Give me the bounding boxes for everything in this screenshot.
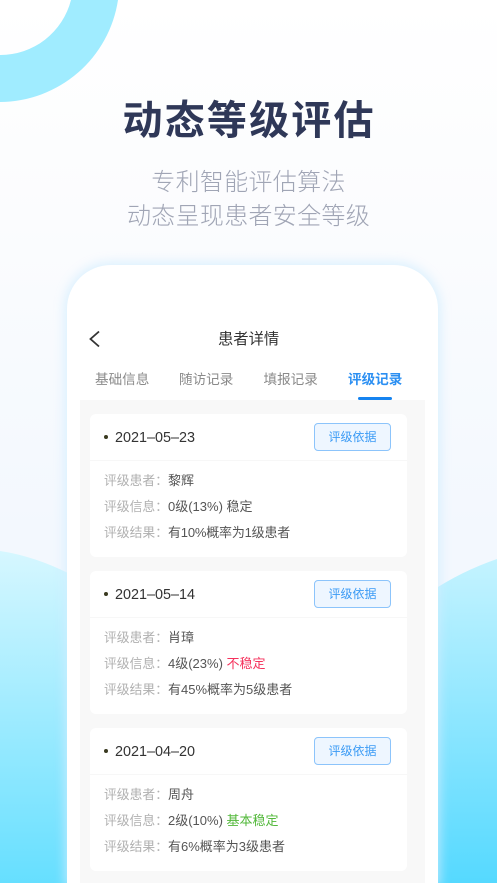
wave: bottom-right [430,559,497,883]
wave: bottom-left [0,551,70,883]
card: record 2021-04-20: 有6%概率为3级患者 [168,838,285,854]
card: record 2021-05-23: 0级(13%) 稳定 [168,498,253,514]
subtitle [127,169,370,230]
card: record 2021-05-23: 评级结果： [104,524,168,540]
card: record 2021-05-14: 4级(23%) 不稳定 [168,656,266,670]
screen title: 患者详情 [218,331,279,348]
subtitle: 动态呈现患者安全等级 [127,203,370,230]
card: record 2021-04-20: 周舟 [168,786,194,802]
card: record 2021-05-14: 评级信息： [104,656,168,670]
card: record 2021-05-14: 肖璋 [168,630,194,644]
card: record 2021-05-14: 评级依据 [328,587,376,601]
card: record 2021-05-23: 评级患者： [104,472,168,488]
card: record 2021-04-20: 评级结果： [104,838,168,854]
card: record 2021-05-14: 评级结果： [104,682,168,696]
tabs: 基础信息 [95,372,149,387]
card: record 2021-05-14: 2021–05–14 [115,587,195,603]
card: record 2021-05-23: 有10%概率为1级患者 [168,524,290,540]
card: record 2021-05-23: 黎辉 [168,472,194,488]
title: 动态等级评估 [122,99,376,143]
card: record 2021-04-20: 2级(10%) 基本稳定 [168,812,279,828]
card: record 2021-04-20: 评级依据 [328,744,376,758]
tabs: 填报记录 [264,372,318,387]
card: record 2021-05-14 [90,571,407,714]
card: record 2021-05-23 [90,414,407,557]
subtitle: 专利智能评估算法 [151,169,346,196]
card: record 2021-05-14: 有45%概率为5级患者 [168,682,292,696]
card: record 2021-04-20 [90,728,407,871]
card: record 2021-05-14: 评级患者： [104,630,168,644]
panel: phone [67,265,438,883]
card: record 2021-05-23: 评级信息： [104,498,168,514]
arc: top-left ring [0,0,118,102]
card: record 2021-04-20: 评级患者： [104,786,168,802]
tabs [95,372,402,400]
panel: record list background [80,400,425,883]
card: record 2021-04-20: 2021–04–20 [115,744,195,760]
card: record 2021-04-20: 评级信息： [104,812,168,828]
card: record 2021-05-23: 评级依据 [328,430,376,444]
icon: back arrow [89,330,100,348]
tabs: 评级记录 [348,372,402,387]
tabs: 随访记录 [179,372,233,387]
card: record 2021-05-23: 2021–05–23 [115,430,195,446]
